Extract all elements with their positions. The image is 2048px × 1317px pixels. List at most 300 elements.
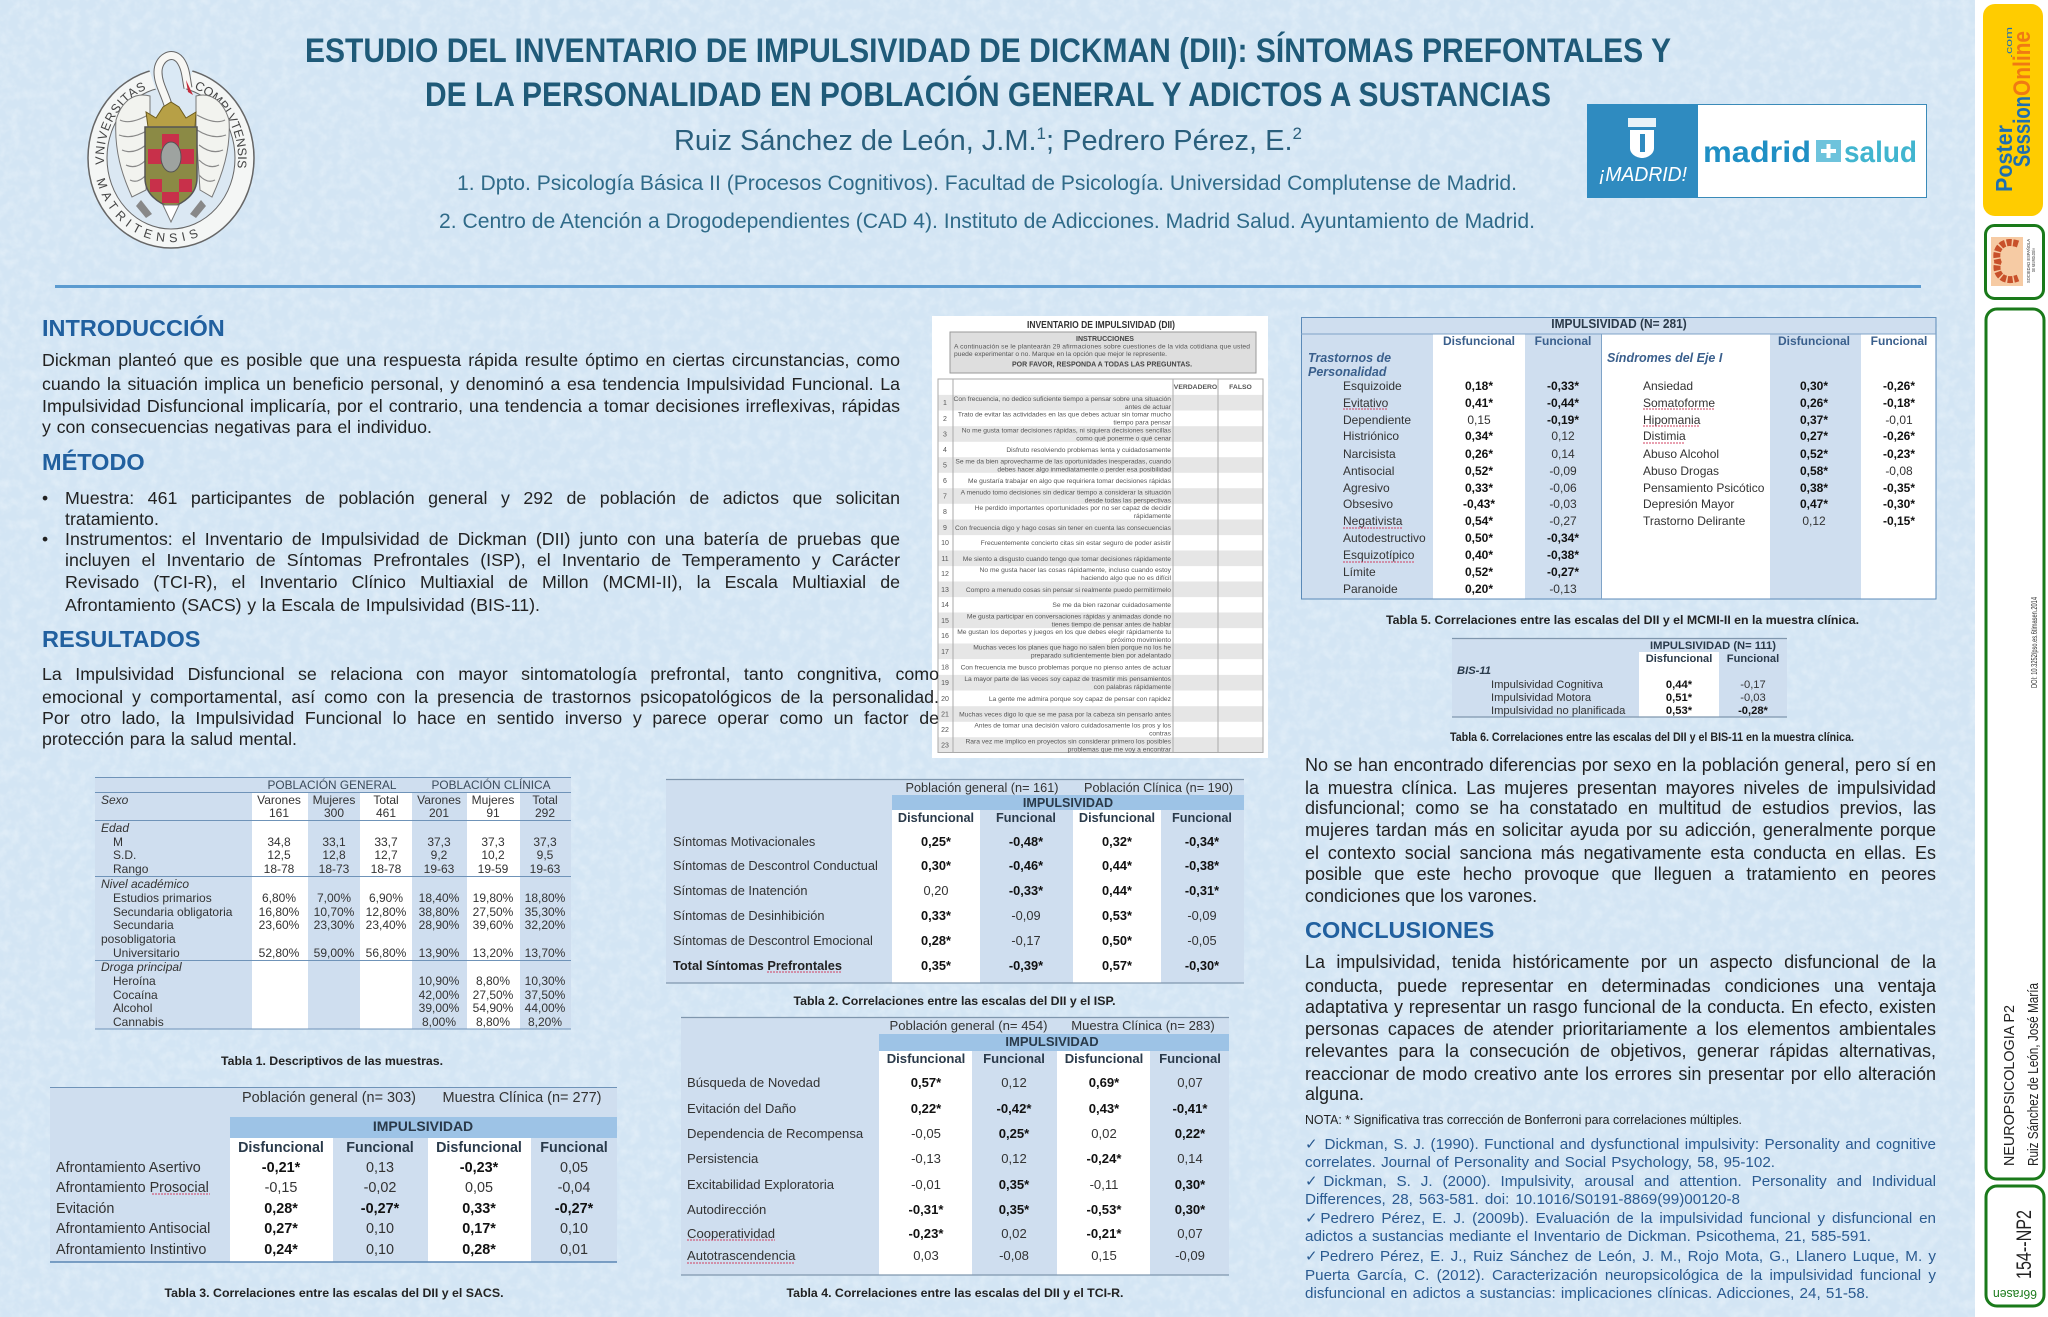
inventory grid: 12 <box>941 571 949 578</box>
table 1: descriptivos: Cocaína <box>113 988 158 1002</box>
table 4: TCI-R: -0,13 <box>911 1151 941 1166</box>
table 3: SACS: Funcional <box>346 1140 414 1156</box>
inventory grid: 18 <box>941 664 949 672</box>
table 2: ISP: 0,28* <box>921 933 951 948</box>
table 2: ISP: 0,50* <box>1102 933 1132 948</box>
table 1: descriptivos: 54,90% <box>473 1001 514 1015</box>
table 5: MCMI-II: 0,26* <box>1800 396 1828 410</box>
table 1: descriptivos: Cannabis <box>113 1015 164 1029</box>
text: introducción: Impulsividad Disfuncional implicaría, por el contrario, una tendencia a tomar decisiones irreflexivas, rápidas <box>42 396 900 416</box>
table 1: descriptivos: Alcohol <box>113 1001 152 1015</box>
table 1: descriptivos: 37,50% <box>525 988 566 1002</box>
table 2: ISP: 0,32* <box>1102 834 1132 849</box>
table 5: MCMI-II: 0,26* <box>1465 447 1493 461</box>
inventory grid: 4 <box>943 447 947 454</box>
table 5: MCMI-II: -0,43* <box>1463 497 1495 511</box>
table 5: MCMI-II: -0,26* <box>1883 379 1915 393</box>
table 2: ISP: -0,09 <box>1187 908 1217 923</box>
text: referencias: correlates. Journal of Personality and Social Psychology, 58, 95-102. <box>1305 1154 1775 1171</box>
text: método: Muestra: 461 participantes de población general y 292 de población de adictos que solicitan <box>65 488 900 508</box>
table 1: descriptivos: posobligatoria <box>101 932 176 946</box>
table 1: descriptivos: Varones <box>417 793 461 807</box>
table 2: ISP: -0,39* <box>1009 958 1043 973</box>
table 1: descriptivos: 23,30% <box>314 918 355 932</box>
text: método: Revisado (TCI-R), el Inventario Clínico Multiaxial de Millon (MCMI-II), la Escala Multiaxial de <box>65 572 900 592</box>
inventory grid: 16 <box>941 633 949 640</box>
table 2: ISP: 0,44* <box>1102 858 1132 873</box>
table 1: descriptivos: 18-73 <box>319 862 350 876</box>
table 4: TCI-R: -0,41* <box>1173 1101 1208 1116</box>
table 1: descriptivos: 35,30% <box>525 905 566 919</box>
table 4: TCI-R: Persistencia <box>687 1151 759 1166</box>
table 4: TCI-R: Dependencia de Recompensa <box>687 1126 864 1141</box>
table 5: MCMI-II: 0,52* <box>1465 565 1493 579</box>
inventory grid: 19 <box>941 680 949 687</box>
inventory grid: Rara vez me implico en proyectos sin considerar primero los posibles <box>965 738 1172 745</box>
table 4: TCI-R: 0,03 <box>913 1248 939 1263</box>
text: referencias: ✓Pedrero Pérez, E. J. (2009b). Evaluación de la impulsividad funcional y disfuncional en <box>1305 1210 1936 1227</box>
table 1: descriptivos: 19,80% <box>473 891 514 905</box>
table 5: MCMI-II: Esquizotípico <box>1343 548 1415 562</box>
sidebar: Poster Session Online badge: Online <box>2009 31 2036 96</box>
table 2: ISP: -0,09 <box>1011 908 1041 923</box>
table 3: SACS: 0,27* <box>264 1221 298 1237</box>
table 5: MCMI-II: 0,58* <box>1800 464 1828 478</box>
text: discusión: mujeres tardan más en solicitar ayuda por su adicción, generalmente porque <box>1305 820 1936 840</box>
text: referencias: adictos a sustancias mediante el Inventario de Dickman. Psicothema, 21, 585-591. <box>1305 1228 1871 1245</box>
affiliations: 2. Centro de Atención a Drogodependientes (CAD 4). Instituto de Adicciones. Madrid Salud. Ayuntamiento de Madrid. <box>439 209 1535 233</box>
inventory grid: A menudo tomo decisiones sin dedicar tiempo a considerar la situación <box>961 489 1171 496</box>
sidebar: Poster Session Online badge <box>1983 4 2043 216</box>
table 3: SACS: Afrontamiento Instintivo <box>56 1242 206 1258</box>
table 4: TCI-R: Búsqueda de Novedad <box>687 1075 820 1090</box>
table 1: descriptivos: 44,00% <box>525 1001 566 1015</box>
table 1: descriptivos: 13,70% <box>525 946 566 960</box>
inventory grid: VERDADERO <box>1174 384 1217 391</box>
text: discusión: posible que este hecho provoque que lleguen a tratamiento en peores <box>1305 864 1936 884</box>
inventory grid: No me gusta tomar decisiones rápidas, ni siquiera decisiones sencillas <box>962 427 1172 434</box>
table 4: TCI-R: 0,02 <box>1001 1226 1027 1241</box>
table 2: ISP: IMPULSIVIDAD <box>1023 796 1113 810</box>
table 4: TCI-R: 0,30* <box>1175 1177 1206 1192</box>
table: inventario de impulsividad <box>932 316 1268 758</box>
logo: Madrid Salud: madrid <box>1703 136 1811 169</box>
table 1: descriptivos: 201 <box>429 806 449 820</box>
caption: tabla 6: Tabla 6. Correlaciones entre las escalas del DII y el BIS-11 en la muestra clínica. <box>1450 732 1854 744</box>
table 3: SACS: -0,23* <box>460 1160 499 1176</box>
table 2: ISP: Disfuncional <box>898 811 974 825</box>
table 5: MCMI-II: Trastorno Delirante <box>1643 514 1746 528</box>
table 3: SACS: 0,10 <box>366 1242 394 1258</box>
table 4: TCI-R: -0,53* <box>1087 1202 1122 1217</box>
table 4: TCI-R: Funcional <box>1159 1051 1221 1066</box>
sidebar: poster code: 154--NP2 <box>2013 1210 2036 1279</box>
text: referencias: Differences, 28, 563-581. doi: 10.1016/S0191-8869(99)00120-8 <box>1305 1191 1740 1208</box>
table 5: MCMI-II: -0,03 <box>1549 497 1577 511</box>
table 1: descriptivos: S.D. <box>113 848 136 862</box>
table 4: TCI-R: 0,25* <box>999 1126 1030 1141</box>
table 3: SACS: Disfuncional <box>238 1140 324 1156</box>
table 4: TCI-R: 0,12 <box>1001 1075 1027 1090</box>
inventory grid: 5 <box>943 462 947 470</box>
table 5: MCMI-II: Funcional <box>1535 334 1591 348</box>
table 1: descriptivos: 28,90% <box>419 918 460 932</box>
authors: 2 <box>1293 124 1302 143</box>
table 4: TCI-R: -0,05 <box>911 1126 941 1141</box>
table 5: MCMI-II: -0,38* <box>1547 548 1579 562</box>
text: discusión <box>1305 755 1936 906</box>
table 1: descriptivos: 32,20% <box>525 918 566 932</box>
table 3: SACS: 0,33* <box>462 1201 496 1217</box>
table 5: MCMI-II: 0,41* <box>1465 396 1493 410</box>
table 1: descriptivos: 19-63 <box>530 862 561 876</box>
table 4: TCI-R: -0,42* <box>997 1101 1032 1116</box>
table 1: descriptivos: 12,8 <box>322 848 346 862</box>
text: resultados <box>42 664 939 749</box>
text: método: Instrumentos: el Inventario de Impulsividad de Dickman (DII) junto con una batería de pruebas que <box>65 529 900 549</box>
table 5: MCMI-II: -0,19* <box>1547 413 1579 427</box>
table 4: TCI-R: IMPULSIVIDAD <box>1005 1034 1099 1049</box>
table 1: descriptivos: 37,3 <box>533 835 557 849</box>
text: resultados: La Impulsividad Disfuncional se relaciona con mayor sintomatología prefrontal, tanto congnitiva, como <box>42 664 939 684</box>
table 4: TCI-R: 0,35* <box>999 1177 1030 1192</box>
text: referencias: ✓ Dickman, S. J. (1990). Functional and dysfunctional impulsivity: Personality and cognitive <box>1305 1136 1936 1153</box>
table 4: TCI-R <box>681 1017 1229 1275</box>
instructions box: puede experimentar o no. Marque en la opción que mejor le represente. <box>954 351 1167 358</box>
table 5: MCMI-II: 0,14 <box>1551 447 1575 461</box>
text: introducción <box>42 350 900 437</box>
table 6: BIS-11: -0,28* <box>1738 705 1769 717</box>
table 4: TCI-R: -0,09 <box>1175 1248 1205 1263</box>
table 5: MCMI-II: Personalidad <box>1308 365 1387 379</box>
table 4: TCI-R: 0,69* <box>1089 1075 1120 1090</box>
inventory grid: 11 <box>941 556 949 563</box>
inventory grid: 2 <box>943 416 947 423</box>
text: resultados: protección para la salud mental. <box>42 729 297 749</box>
table 3: SACS: -0,02 <box>364 1180 396 1196</box>
text: conclusiones: adaptativa y representar un rasgo funcional de la conducta. En efecto, existen <box>1305 997 1936 1017</box>
inventory grid: Disfruto resolviendo problemas lenta y cuidadosamente <box>1006 447 1171 454</box>
table 1: descriptivos: 27,50% <box>473 905 514 919</box>
table 4: TCI-R: -0,23* <box>909 1226 944 1241</box>
table 1: descriptivos: 10,90% <box>419 974 460 988</box>
table 5: MCMI-II: Disfuncional <box>1778 334 1850 348</box>
table 6: BIS-11: 0,44* <box>1666 679 1693 691</box>
table 5: MCMI-II: -0,23* <box>1883 447 1915 461</box>
table 5: MCMI-II: -0,34* <box>1547 531 1579 545</box>
table 1: descriptivos: 33,1 <box>322 835 346 849</box>
table 1: descriptivos: 12,7 <box>374 848 398 862</box>
table 2: ISP: -0,34* <box>1185 834 1219 849</box>
table 1: descriptivos: 19-59 <box>478 862 509 876</box>
table 3: SACS: 0,10 <box>560 1221 588 1237</box>
table 1: descriptivos: 6,80% <box>262 891 296 905</box>
table 1: descriptivos: 56,80% <box>366 946 407 960</box>
table 1: descriptivos: Nivel académico <box>101 877 189 891</box>
text: conclusiones: reaccionar de modo creativo ante los errores sin presentar por ello alteración <box>1305 1064 1936 1084</box>
inventory grid: La gente me admira porque soy capaz de pensar con rapidez <box>989 696 1172 703</box>
table 3: SACS: 0,05 <box>465 1180 493 1196</box>
sidebar: poster details: Ruiz Sánchez de León, José María <box>2025 982 2042 1166</box>
table 5: MCMI-II: Disfuncional <box>1443 334 1515 348</box>
table 4: TCI-R: -0,21* <box>1087 1226 1122 1241</box>
table 5: MCMI-II: Narcisista <box>1343 447 1396 461</box>
affiliations: 1. Dpto. Psicología Básica II (Procesos Cognitivos). Facultad de Psicología. Universidad Complutense de Madrid. <box>457 171 1517 195</box>
table 4: TCI-R: 0,12 <box>1001 1151 1027 1166</box>
table 1: descriptivos: Estudios primarios <box>113 891 212 905</box>
table 1: descriptivos: 39,00% <box>419 1001 460 1015</box>
table 6: BIS-11: Impulsividad Cognitiva <box>1491 679 1604 691</box>
logo: Madrid Salud: ¡MADRID! <box>1599 164 1687 186</box>
text: referencias <box>1305 1136 1936 1302</box>
sidebar: poster details: DOI: 10.3252/pso.es.6timasen.2014 <box>2029 597 2039 688</box>
sidebar: Poster Session Online badge: Poster <box>1991 125 2017 192</box>
authors: 1 <box>1037 124 1046 143</box>
sidebar: Poster Session Online badge: .com <box>2004 27 2014 58</box>
text: introducción: cuando la situación implica un beneficio personal, y denominó a esa tendencia Impulsividad Funcional. La <box>42 374 900 394</box>
table 1: descriptivos: 42,00% <box>419 988 460 1002</box>
inventory grid: Me siento a disgusto cuando tengo que tomar decisiones rápidamente <box>963 556 1171 563</box>
table 6: BIS-11: -0,03 <box>1740 692 1766 704</box>
inventory grid: No me gusta hacer las cosas rápidamente, incluso cuando estoy <box>980 567 1172 574</box>
text: resultados: Por otro lado, la Impulsividad Funcional lo hace en sentido inverso y parece operar como un factor de <box>42 708 939 728</box>
inventory grid: 6 <box>943 478 947 485</box>
text: método: • <box>42 488 48 508</box>
table 5: MCMI-II: 0,12 <box>1802 514 1826 528</box>
table 5: MCMI-II: 0,38* <box>1800 481 1828 495</box>
icon: Madrid crest <box>1628 118 1656 158</box>
table 3: SACS: 0,10 <box>366 1221 394 1237</box>
table 4: TCI-R: 0,14 <box>1177 1151 1203 1166</box>
table 5: MCMI-II: Abuso Drogas <box>1643 464 1719 478</box>
text: referencias: ✓Pedrero Pérez, E. J., Ruiz Sánchez de León, J. M., Rojo Mota, G., Llanero Luque, M. y <box>1305 1248 1936 1265</box>
instructions box: A continuación se le plantearán 29 afirmaciones sobre cuestiones de la vida cotidiana que usted <box>954 344 1250 350</box>
table 2: ISP: -0,48* <box>1009 834 1043 849</box>
sidebar: Poster Session Online badge: Session <box>2009 96 2036 167</box>
inventory grid: 21 <box>941 712 949 718</box>
inventory grid: Compro a menudo cosas sin pensar si realmente puedo permitírmelo <box>966 587 1171 594</box>
logo: Universidad Complutense seal: VNIVERSITAS <box>95 82 145 165</box>
inventory grid: Muchas veces digo lo que se me pasa por la cabeza sin pensarlo antes <box>959 712 1172 718</box>
affiliations <box>439 171 1535 233</box>
table 5: MCMI-II: -0,30* <box>1883 497 1915 511</box>
text: referencias: Puerta García, C. (2012). Caracterización neuropsicológica de la impulsividad funcional y <box>1305 1267 1936 1284</box>
heading: introducción: INTRODUCCIÓN <box>42 315 225 341</box>
logo: Madrid Salud: salud <box>1844 136 1917 169</box>
table 2: ISP: Total Síntomas Prefrontales <box>673 958 842 973</box>
table 4: TCI-R: 0,07 <box>1177 1075 1203 1090</box>
inventory grid: 3 <box>943 432 947 438</box>
table 3: SACS: -0,15 <box>265 1180 297 1196</box>
table 2: ISP: Funcional <box>1172 811 1232 825</box>
table 6: BIS-11: 0,53* <box>1666 705 1693 717</box>
table 1: descriptivos: 38,80% <box>419 905 460 919</box>
table 3: SACS: 0,28* <box>264 1201 298 1217</box>
table 2: ISP: -0,30* <box>1185 958 1219 973</box>
table 1: descriptivos: 18,40% <box>419 891 460 905</box>
table 5: MCMI-II: 0,54* <box>1465 514 1493 528</box>
text: conclusiones: personas capaces de atender prioritariamente a los elementos ambientales <box>1305 1019 1936 1039</box>
table 2: ISP: Síntomas de Descontrol Conductual <box>673 858 878 873</box>
text: introducción: y con consecuencias negativas para el individuo. <box>42 417 432 437</box>
table 5: MCMI-II: -0,13 <box>1549 582 1577 596</box>
table 4: TCI-R: 0,30* <box>1175 1202 1206 1217</box>
table 4: TCI-R: Autodirección <box>687 1202 766 1217</box>
inventory grid: Antes de tomar una decisión valoro cuidadosamente los pros y los <box>974 723 1172 730</box>
text: método: incluyen el Inventario de Síntomas Prefrontales (ISP), el Inventario de Temperamento y Carácter <box>65 550 900 570</box>
inventory grid: 20 <box>941 696 949 703</box>
note: NOTA: * Significativa tras corrección de Bonferroni para correlaciones múltiples. <box>1305 1113 1742 1127</box>
table 3: SACS: Afrontamiento Antisocial <box>56 1221 210 1237</box>
table 1: descriptivos: Mujeres <box>472 793 514 807</box>
table 5: MCMI-II: -0,33* <box>1547 379 1579 393</box>
table 1: descriptivos: 12,5 <box>267 848 291 862</box>
inventory grid: 23 <box>941 742 949 750</box>
table 5: MCMI-II: Paranoide <box>1343 582 1398 596</box>
inventory grid: 14 <box>941 602 949 609</box>
table 2: ISP: -0,33* <box>1009 883 1043 898</box>
text: método: Afrontamiento (SACS) y la Escala de Impulsividad (BIS-11). <box>65 595 540 615</box>
table 4: TCI-R: -0,31* <box>909 1202 944 1217</box>
inventory grid: Con frecuencia digo y hago cosas sin tener en cuenta las consecuencias <box>955 525 1172 532</box>
sidebar: poster details: NEUROPSICOLOGIA P2 <box>2001 1005 2018 1166</box>
inventory grid: Con frecuencia, no dedico suficiente tiempo a pensar sobre una situación <box>954 396 1171 403</box>
table 1: descriptivos: 300 <box>324 806 344 820</box>
table 4: TCI-R: 0,22* <box>1175 1126 1206 1141</box>
sidebar: society logo: SOCIEDAD ESPAÑOLA <box>2026 239 2031 283</box>
table 1: descriptivos: 8,20% <box>528 1015 562 1029</box>
table 5: MCMI-II: 0,12 <box>1551 429 1575 443</box>
text: conclusiones <box>1305 952 1936 1104</box>
table 4: TCI-R: Autotrascendencia <box>687 1248 796 1263</box>
table 5: MCMI-II: Autodestructivo <box>1343 531 1426 545</box>
table 1: descriptivos: 27,50% <box>473 988 514 1002</box>
inventory grid: La mayor parte de las veces soy capaz de trasmitir mis pensamientos <box>964 676 1172 683</box>
table 5: MCMI-II: Somatoforme <box>1643 396 1715 410</box>
table 5: MCMI-II: -0,26* <box>1883 429 1915 443</box>
table 1: descriptivos: 59,00% <box>314 946 355 960</box>
table 1: descriptivos: Droga principal <box>101 960 182 974</box>
sidebar: poster code <box>1986 1186 2044 1306</box>
text: conclusiones: alguna. <box>1305 1084 1364 1104</box>
table 1: descriptivos: Mujeres <box>313 793 355 807</box>
table 3: SACS: Muestra Clínica (n= 277) <box>442 1090 602 1106</box>
table 3: SACS: IMPULSIVIDAD <box>373 1118 473 1134</box>
text: conclusiones: relevantes para la consecución de objetivos, generar rápidas alternativas, <box>1305 1041 1936 1061</box>
table 5: MCMI-II: -0,44* <box>1547 396 1579 410</box>
text: método: • <box>42 529 48 549</box>
table 1: descriptivos: Universitario <box>113 946 180 960</box>
table 6: BIS-11: -0,17 <box>1740 679 1766 691</box>
table 4: TCI-R: Muestra Clínica (n= 283) <box>1071 1018 1215 1033</box>
table 5: MCMI-II: 0,47* <box>1800 497 1828 511</box>
table 2: ISP: Síntomas de Desinhibición <box>673 908 825 923</box>
icon: brain <box>1997 243 2018 280</box>
inventory grid: antes de actuar <box>1125 404 1172 411</box>
table 5: MCMI-II: -0,01 <box>1885 413 1913 427</box>
table 1: descriptivos <box>95 777 571 1029</box>
table 3: SACS: -0,04 <box>558 1180 590 1196</box>
table 1: descriptivos: Secundaria obligatoria <box>113 905 233 919</box>
table 2: ISP: -0,05 <box>1187 933 1217 948</box>
table 1: descriptivos: Total <box>532 793 558 807</box>
table 5: MCMI-II: Dependiente <box>1343 413 1411 427</box>
table 1: descriptivos: 8,80% <box>476 974 510 988</box>
heading: conclusiones: CONCLUSIONES <box>1305 917 1494 943</box>
inventory grid: 1 <box>943 400 947 407</box>
table 5: MCMI-II: Síndromes del Eje I <box>1607 351 1723 365</box>
caption: tabla 3: Tabla 3. Correlaciones entre las escalas del DII y el SACS. <box>164 1288 504 1300</box>
table 4: TCI-R: -0,24* <box>1087 1151 1122 1166</box>
table 5: MCMI-II: 0,50* <box>1465 531 1493 545</box>
table 3: SACS: 0,24* <box>264 1242 298 1258</box>
table 1: descriptivos: 37,3 <box>427 835 451 849</box>
table 3: SACS: -0,27* <box>555 1201 594 1217</box>
inventory grid: 7 <box>943 494 947 500</box>
table 5: MCMI-II: 0,15 <box>1467 413 1491 427</box>
table 4: TCI-R: 0,02 <box>1091 1126 1117 1141</box>
table 3: SACS: -0,27* <box>361 1201 400 1217</box>
table 1: descriptivos: 9,2 <box>431 848 448 862</box>
table 1: descriptivos: 18-78 <box>264 862 295 876</box>
text: conclusiones: conducta, puede representar en determinadas condiciones una ventaja <box>1305 976 1936 996</box>
table 2: ISP: 0,35* <box>921 958 951 973</box>
table 1: descriptivos: 39,60% <box>473 918 514 932</box>
caption: tabla 1: Tabla 1. Descriptivos de las muestras. <box>221 1056 443 1068</box>
logo: Madrid Salud <box>1587 104 1926 198</box>
table 3: SACS: Evitación <box>56 1201 114 1217</box>
table 4: TCI-R: Disfuncional <box>887 1051 965 1066</box>
table 2: ISP: Síntomas Motivacionales <box>673 834 815 849</box>
table 3: SACS: Población general (n= 303) <box>242 1090 416 1106</box>
table 1: descriptivos: Edad <box>101 821 129 835</box>
table 1: descriptivos: 23,60% <box>259 918 300 932</box>
table 4: TCI-R: -0,11 <box>1090 1177 1118 1192</box>
table 1: descriptivos: 161 <box>269 806 289 820</box>
inventory grid: contras <box>1149 731 1172 738</box>
text: método <box>42 488 900 615</box>
table 5: MCMI-II: -0,35* <box>1883 481 1915 495</box>
table 5: MCMI-II: 0,52* <box>1465 464 1493 478</box>
table 1: descriptivos: 13,20% <box>473 946 514 960</box>
table 1: descriptivos: 461 <box>376 806 396 820</box>
text: referencias: ✓Dickman, S. J. (2000). Impulsivity, arousal and attention. Personality and Individual <box>1305 1173 1936 1190</box>
table 5: MCMI-II: 0,20* <box>1465 582 1493 596</box>
table 5: MCMI-II: IMPULSIVIDAD (N= 281) <box>1551 317 1687 331</box>
table 2: ISP: Población general (n= 161) <box>906 780 1058 795</box>
inventory grid: preparado suficientemente bien por adelantado <box>1031 653 1171 660</box>
table 2: ISP: 0,25* <box>921 834 951 849</box>
inventory grid: Me gustan los deportes y juegos en los que debes elegir rápidamente tu <box>957 629 1171 636</box>
inventory grid: tiempo para pensar <box>1113 420 1172 427</box>
table 1: descriptivos: 8,00% <box>422 1015 456 1029</box>
table 3: SACS: Funcional <box>540 1140 608 1156</box>
inventory grid: con palabras rápidamente <box>1094 684 1171 691</box>
table: inventario de impulsividad: INVENTARIO DE IMPULSIVIDAD (DII) <box>1027 319 1175 331</box>
text: discusión: el contexto social sanciona más negativamente esta conducta en ellas. Es <box>1305 843 1936 863</box>
inventory grid: Con frecuencia me busco problemas porque no pienso antes de actuar <box>961 664 1172 672</box>
table 1: descriptivos: Secundaria <box>113 918 174 932</box>
table 1: descriptivos: 23,40% <box>366 918 407 932</box>
table 3: SACS: 0,01 <box>560 1242 588 1258</box>
inventory grid: FALSO <box>1229 384 1252 391</box>
table 5: MCMI-II: Funcional <box>1871 334 1927 348</box>
inventory grid <box>938 379 1263 753</box>
sidebar: poster details <box>1986 309 2044 1179</box>
table 2: ISP: Población Clínica (n= 190) <box>1084 780 1233 795</box>
table 2: ISP: -0,17 <box>1011 933 1041 948</box>
table 1: descriptivos: POBLACIÓN GENERAL <box>268 777 397 792</box>
